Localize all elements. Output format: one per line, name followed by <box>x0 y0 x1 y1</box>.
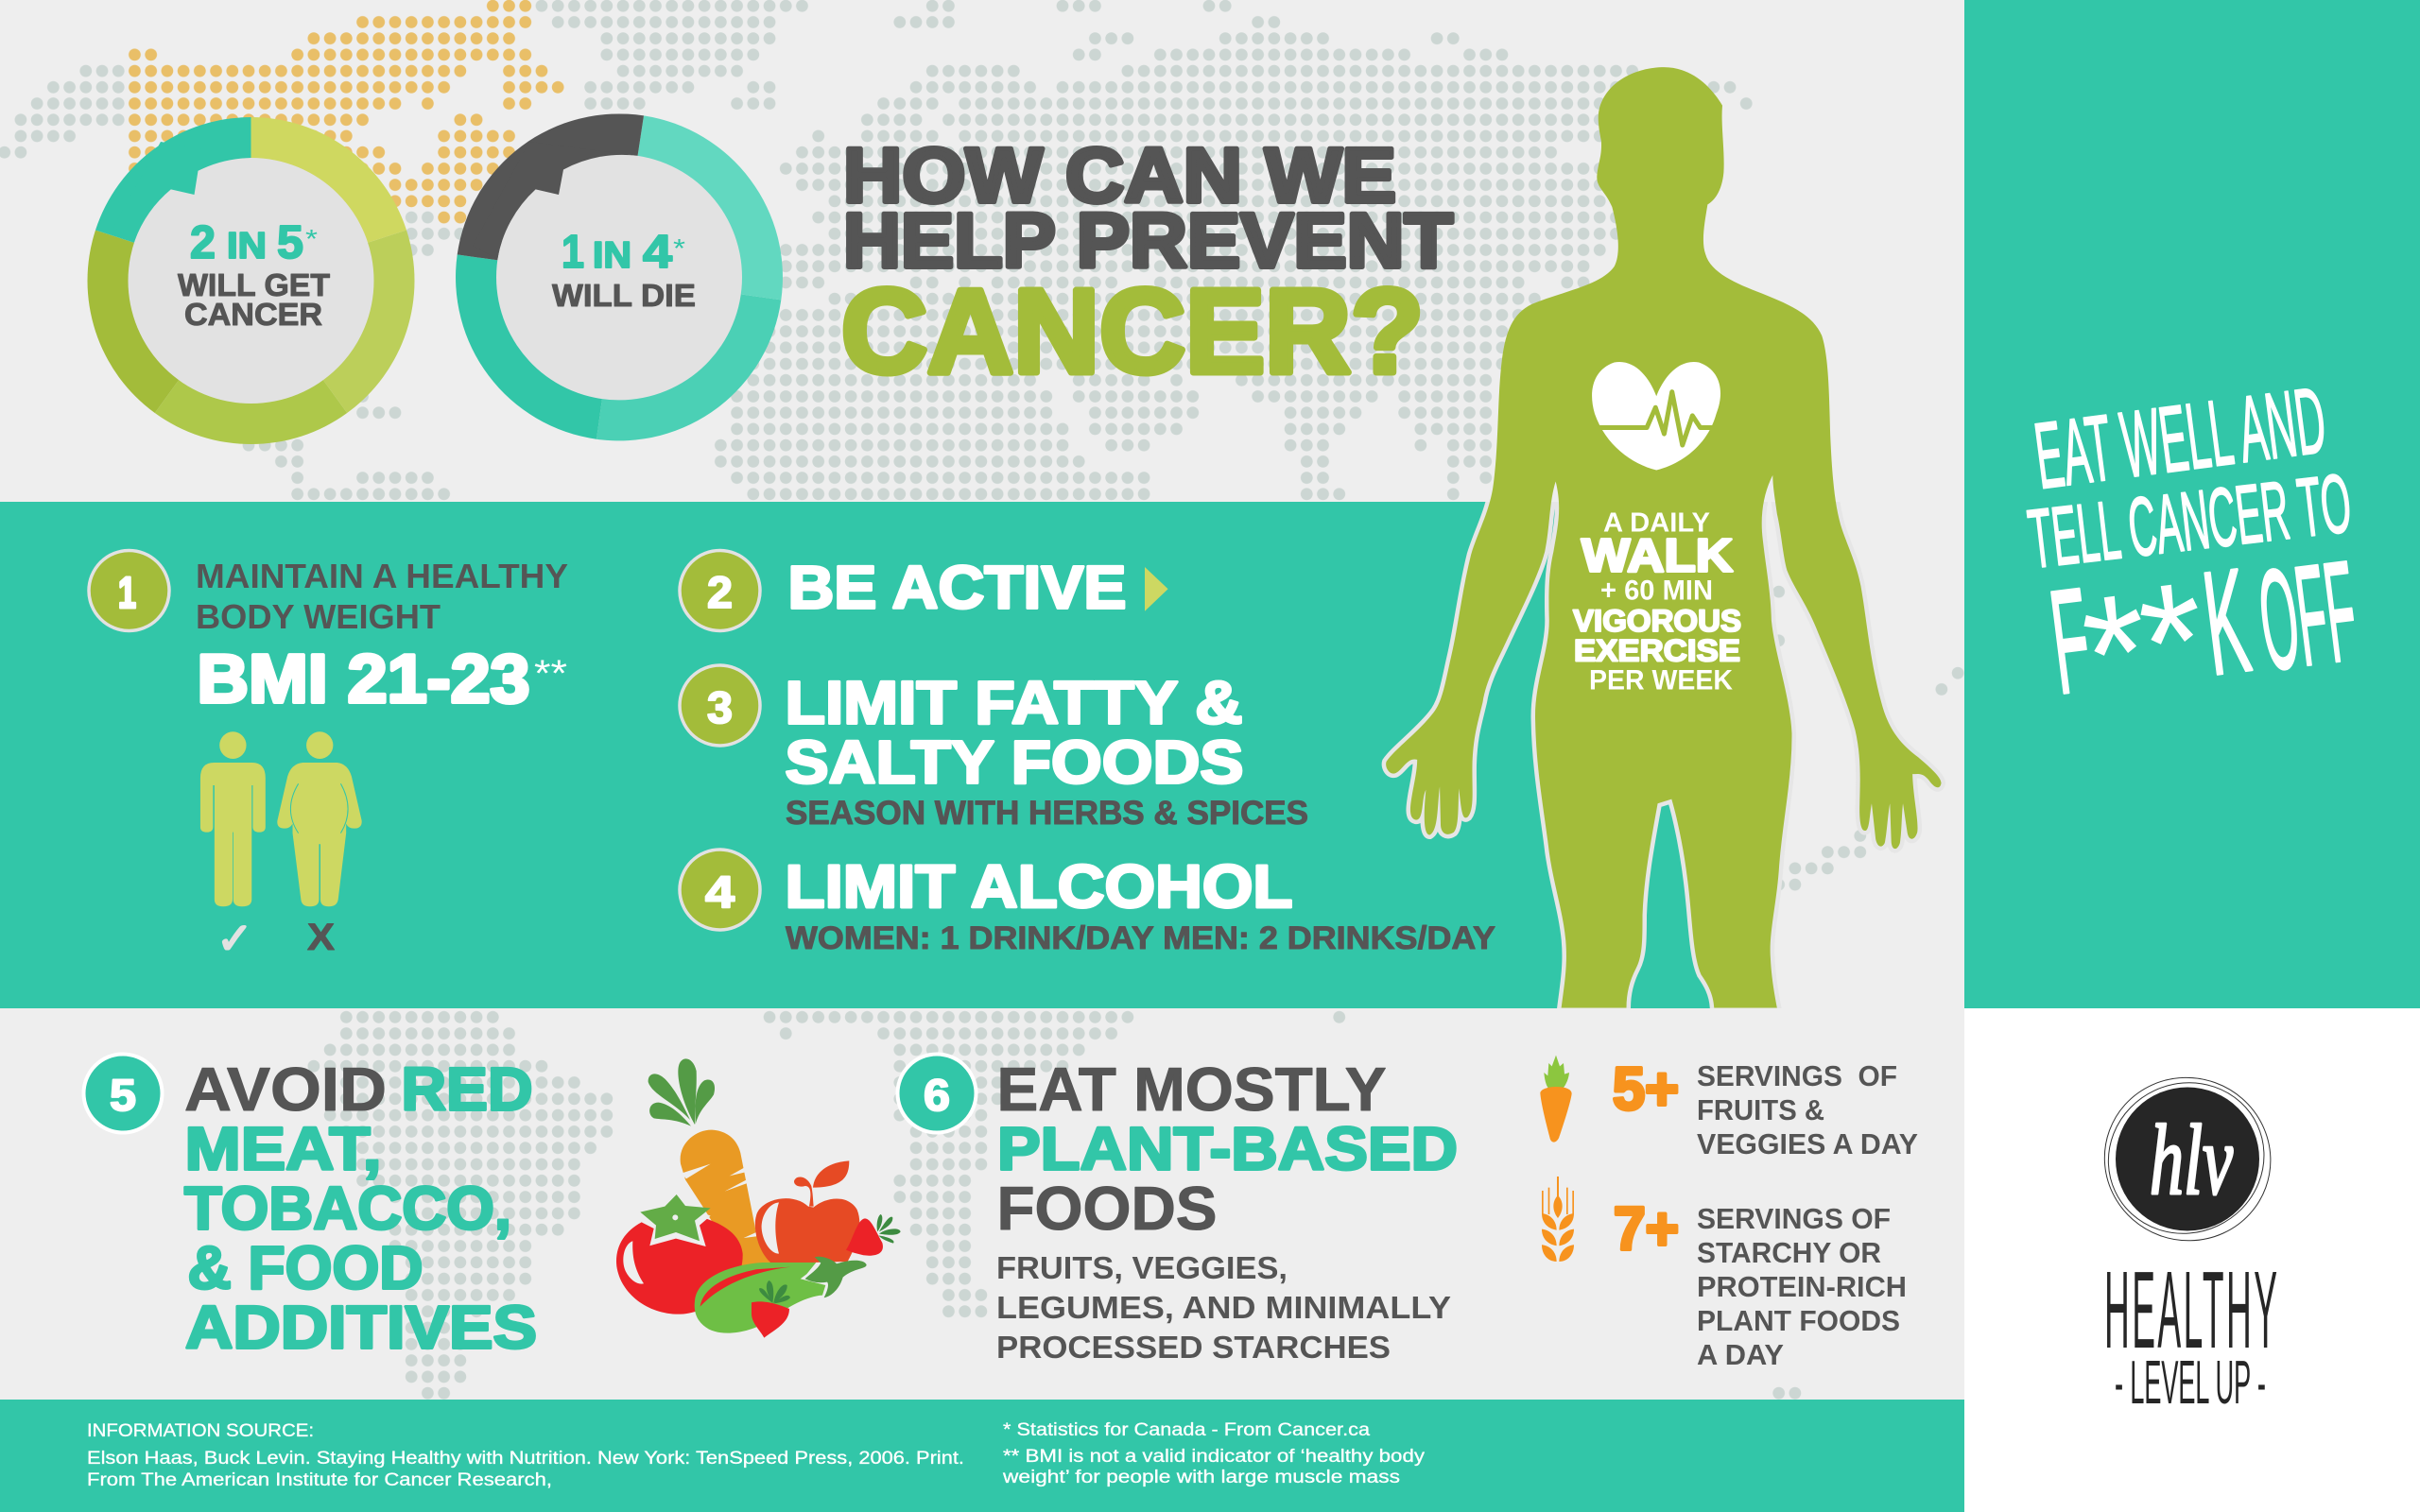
tip 2: be active <box>680 550 1168 631</box>
body text: daily walk and vigorous exercise: PER WEEK <box>1589 665 1733 696</box>
slogan: * <box>2131 547 2215 738</box>
slogan <box>2024 367 2364 749</box>
badge 1 <box>89 550 169 631</box>
tip 1 heading <box>196 557 568 636</box>
footer: information sources: Elson Haas, Buck Levin. Staying Healthy with Nutrition. New York: TenSpeed Press, 2006. Print. <box>87 1449 964 1469</box>
body text: daily walk and vigorous exercise <box>1573 508 1741 696</box>
arrow <box>1145 567 1168 611</box>
tip 6: eat mostly plant-based foods: PROCESSED STARCHES <box>996 1330 1391 1365</box>
donut: 2 in 5 will get cancer: CANCER <box>184 297 322 332</box>
stat: 5+ servings of fruits and veggies <box>1613 1055 1918 1160</box>
icon: carrot serving <box>1540 1056 1572 1143</box>
icon: wheat serving <box>1542 1177 1574 1262</box>
donut: 2 in 5 will get cancer <box>88 117 414 444</box>
tip 4: limit alcohol: LIMIT ALCOHOL <box>785 852 1293 920</box>
tip 6: eat mostly plant-based foods <box>898 1055 1458 1365</box>
stat: 7+ servings of starchy or protein-rich plant foods: A DAY <box>1697 1338 1784 1371</box>
donut: 2 in 5 will get cancer: 5 <box>277 217 303 268</box>
tip 2: be active: BE ACTIVE <box>788 554 1127 622</box>
logo disc <box>2082 1055 2293 1263</box>
tip 6: eat mostly plant-based foods: LEGUMES, AND MINIMALLY <box>996 1290 1451 1325</box>
logo: healthy level up <box>2082 1055 2293 1417</box>
check mark: ✓ <box>216 913 253 964</box>
tomato <box>616 1216 743 1314</box>
panel: teal band for tips 1 to 4 <box>0 502 1730 1008</box>
donut: 1 in 4 will die <box>456 113 783 440</box>
tip 2: be active: 2 <box>707 567 733 617</box>
logo wordmark: HEALTHY <box>2104 1249 2277 1372</box>
donut: 1 in 4 will die: 1 <box>562 227 584 278</box>
stat: 5+ servings of fruits and veggies: 5+ <box>1613 1055 1679 1123</box>
donut: 1 in 4 will die: 4 <box>643 227 672 278</box>
tip 5: avoid red meat, tobacco and food additives: MEAT, <box>185 1115 382 1183</box>
footer: information sources: From The American Institute for Cancer Research, <box>87 1470 552 1490</box>
stat: 7+ servings of starchy or protein-rich plant foods: 7+ <box>1614 1194 1679 1263</box>
donut: 1 in 4 will die: IN <box>593 235 631 276</box>
icon: healthy weight person <box>200 731 266 906</box>
tip 6: eat mostly plant-based foods: FOODS <box>996 1174 1218 1243</box>
slogan: K <box>2196 539 2257 707</box>
logo disc: hlv <box>2150 1105 2234 1215</box>
dotted world map: lower half <box>305 1017 1804 1393</box>
BMI target: ** <box>534 653 567 695</box>
donut: 1 in 4 will die: * <box>673 233 685 263</box>
tip 3: limit fatty and salty foods <box>680 665 1308 832</box>
carrot <box>681 1130 772 1273</box>
slogan: F <box>2043 558 2099 726</box>
human body silhouette <box>1386 67 1941 1007</box>
carrot leaves <box>648 1058 715 1126</box>
body text: daily walk and vigorous exercise: VIGOROUS <box>1573 604 1741 638</box>
panel: right teal column <box>1964 0 2420 1008</box>
tip 5: avoid red meat, tobacco and food additives: RED <box>401 1055 533 1123</box>
tip 1: maintain healthy body weight <box>89 550 568 964</box>
stat: 5+ servings of fruits and veggies: VEGGIES A DAY <box>1697 1127 1918 1160</box>
title: CANCER? <box>841 265 1424 398</box>
tip 6: eat mostly plant-based foods: 6 <box>924 1070 950 1120</box>
icon: heart with pulse <box>1592 362 1720 471</box>
title: HELP PREVENT <box>843 198 1453 284</box>
donut: 1 in 4 will die: WILL DIE <box>552 278 696 313</box>
tip 4: limit alcohol: 4 <box>705 867 735 917</box>
stat: 7+ servings of starchy or protein-rich plant foods: PLANT FOODS <box>1697 1304 1900 1337</box>
beet <box>752 1301 789 1338</box>
tip 6: eat mostly plant-based foods: EAT MOSTLY <box>996 1055 1386 1124</box>
strawberry <box>846 1218 883 1256</box>
donut: 2 in 5 will get cancer: IN <box>227 226 267 266</box>
tip 5: avoid red meat, tobacco and food additives: AVOID <box>184 1055 387 1124</box>
tip 4: limit alcohol: WOMEN: 1 DRINK/DAY MEN: 2 DRINKS/DAY <box>786 920 1495 956</box>
donut: 2 in 5 will get cancer: 2 <box>190 217 216 268</box>
tip 4: limit alcohol <box>680 850 1495 956</box>
tip 3: limit fatty and salty foods: SEASON WITH HERBS & SPICES <box>786 795 1308 832</box>
tip 5: avoid red meat, tobacco and food additives: ADDITIVES <box>185 1293 537 1361</box>
footer: footnotes <box>1002 1420 1426 1487</box>
footer: footnotes: weight’ for people with large muscle mass <box>1002 1468 1400 1487</box>
tip 6: eat mostly plant-based foods: FRUITS, VEGGIES, <box>996 1250 1288 1285</box>
apple <box>755 1198 859 1263</box>
tip 1 heading: BODY WEIGHT <box>196 597 441 636</box>
stat: 7+ servings of starchy or protein-rich plant foods: STARCHY OR <box>1697 1236 1881 1269</box>
stat: 5+ servings of fruits and veggies: SERVINGS OF <box>1697 1059 1897 1092</box>
BMI target: BMI 21-23 <box>197 642 529 717</box>
tip 3: limit fatty and salty foods: LIMIT FATTY & <box>785 669 1242 737</box>
tip 3: limit fatty and salty foods: 3 <box>707 682 733 732</box>
cross mark: X <box>307 917 335 958</box>
tip 5: avoid red meat, tobacco and food additives <box>83 1055 537 1361</box>
body text: daily walk and vigorous exercise: + 60 MIN <box>1600 575 1713 607</box>
zucchini <box>695 1263 825 1333</box>
donut: 2 in 5 will get cancer: WILL GET <box>178 267 330 302</box>
panel: footer band <box>0 1400 1964 1512</box>
body text: daily walk and vigorous exercise: A DAILY <box>1603 508 1710 539</box>
tip 6: eat mostly plant-based foods: PLANT-BASED <box>997 1115 1458 1183</box>
panel: logo white block <box>1964 1008 2420 1512</box>
footer: information sources: INFORMATION SOURCE: <box>87 1421 314 1441</box>
body text: daily walk and vigorous exercise: WALK <box>1582 531 1733 582</box>
slogan: * <box>2074 558 2158 749</box>
icon: overweight person <box>277 731 362 906</box>
body text: daily walk and vigorous exercise: EXERCISE <box>1574 633 1740 667</box>
tip 5: avoid red meat, tobacco and food additives: 5 <box>110 1070 136 1120</box>
stat: 7+ servings of starchy or protein-rich plant foods: PROTEIN-RICH <box>1697 1270 1907 1303</box>
title <box>841 132 1453 398</box>
badge 1: 1 <box>118 568 136 617</box>
tip 1 heading: MAINTAIN A HEALTHY <box>196 557 568 595</box>
tip 3: limit fatty and salty foods: SALTY FOODS <box>785 728 1244 796</box>
footer: footnotes: ** BMI is not a valid indicator of ‘healthy body <box>1003 1447 1426 1467</box>
dotted world map: upper half <box>0 6 1966 885</box>
footer: information sources <box>87 1421 964 1490</box>
title: HOW CAN WE <box>843 132 1396 219</box>
stat: 7+ servings of starchy or protein-rich plant foods <box>1614 1194 1907 1371</box>
tip 5: avoid red meat, tobacco and food additives: & FOOD <box>187 1234 424 1302</box>
donut: 2 in 5 will get cancer: * <box>305 224 318 253</box>
logo: healthy level up: - LEVEL UP - <box>2115 1348 2266 1417</box>
footer: footnotes: * Statistics for Canada - From Cancer.ca <box>1003 1420 1370 1440</box>
tip 5: avoid red meat, tobacco and food additives: TOBACCO, <box>184 1174 511 1242</box>
stat: 5+ servings of fruits and veggies: FRUITS & <box>1697 1093 1824 1126</box>
icon: vegetables and fruit group <box>616 1058 901 1338</box>
stat: 7+ servings of starchy or protein-rich plant foods: SERVINGS OF <box>1697 1202 1891 1235</box>
